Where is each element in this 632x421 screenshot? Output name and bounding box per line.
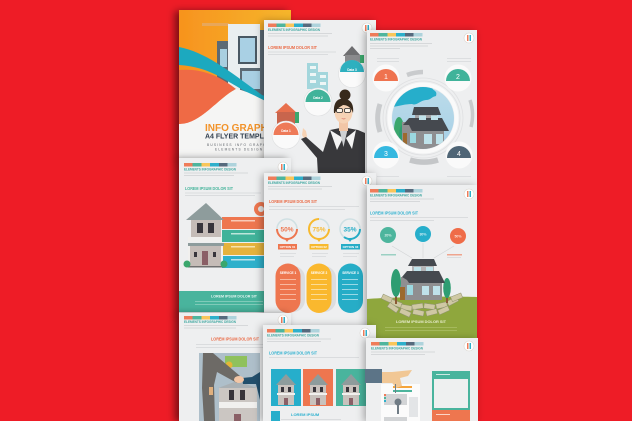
- logo: [362, 176, 372, 186]
- capsule service 3: [338, 264, 363, 313]
- gauge 50%: [277, 219, 297, 242]
- logo: [278, 315, 288, 325]
- cover subtitle: A4 FLYER TEMPLATE: [205, 134, 278, 140]
- capsule long shadows: [280, 266, 336, 312]
- gauge 75%: 75%: [312, 226, 326, 234]
- step 2 bubble: 2: [456, 74, 460, 81]
- page: three house tiles: [263, 325, 376, 421]
- logo: [278, 162, 288, 172]
- heading: LOREM IPSUM DOLOR SIT: [269, 350, 317, 356]
- corner text: [377, 58, 471, 177]
- house: [184, 203, 228, 268]
- page: handshake: [179, 313, 291, 421]
- page: percent gauges: [264, 173, 376, 325]
- cover building: [202, 23, 280, 96]
- teal footer band: LOREM IPSUM DOLOR SIT: [211, 294, 257, 298]
- coral house: [275, 103, 299, 124]
- option bubble 3: Data 3: [347, 68, 357, 72]
- step 2 bubble: [444, 64, 472, 92]
- capsule service 2: SERVICE 2: [311, 271, 328, 275]
- capsule service 2: [306, 264, 332, 313]
- document with key: [381, 384, 420, 421]
- central house illustration: [392, 87, 454, 149]
- handshake illustration: [199, 353, 260, 421]
- ribbon blue: [222, 256, 267, 268]
- flyer collage scene: [169, 6, 480, 421]
- step 1 bubble: [372, 64, 400, 92]
- circle 50% coral: 50%: [454, 234, 462, 238]
- header bar: [371, 342, 424, 346]
- header label: ELEMENTS INFOGRAPHIC DESIGN: [268, 181, 320, 185]
- option labels: OPTION 01: [280, 245, 296, 249]
- hand holding key: [382, 370, 412, 393]
- header label: ELEMENTS INFOGRAPHIC DESIGN: [184, 168, 236, 172]
- step 1 bubble: 1: [384, 74, 388, 81]
- tile coral: [303, 369, 333, 406]
- header label: ELEMENTS INFOGRAPHIC DESIGN: [371, 346, 423, 350]
- logo: [362, 23, 372, 33]
- logo: [464, 341, 474, 351]
- page: circular diagram: [367, 30, 477, 185]
- circle 30% blue: 30%: [419, 232, 427, 236]
- tile teal: [336, 369, 366, 406]
- heading: LOREM IPSUM DOLOR SIT: [268, 45, 317, 50]
- step 3 bubble: [372, 142, 400, 168]
- connector lines: [392, 243, 454, 258]
- heading: LOREM IPSUM DOLOR SIT: [370, 210, 418, 216]
- teal footer band: [179, 291, 291, 312]
- header bar: [370, 189, 422, 192]
- header label: ELEMENTS INFOGRAPHIC DESIGN: [267, 334, 319, 338]
- footer caption: LOREM IPSUM DOLOR SIT: [396, 320, 447, 324]
- blue towers: [307, 63, 328, 92]
- page: house on money: [367, 185, 477, 338]
- header bar: [267, 329, 320, 332]
- heading: LOREM IPSUM DOLOR SIT: [185, 186, 233, 191]
- header label: ELEMENTS INFOGRAPHIC DESIGN: [370, 38, 422, 42]
- cover title: INFO GRAPHIC: [205, 123, 278, 134]
- page: woman presenter: [264, 20, 376, 175]
- page: cover: [179, 10, 291, 160]
- header bar: [184, 163, 236, 166]
- green hill: [367, 297, 477, 338]
- header label: ELEMENTS INFOGRAPHIC DESIGN: [268, 28, 320, 32]
- logo: [360, 328, 370, 338]
- option bubble 1: Data 1: [281, 129, 291, 133]
- sleeve over pages: [365, 369, 382, 383]
- header label: ELEMENTS INFOGRAPHIC DESIGN: [184, 320, 236, 324]
- outer ring segments: [378, 72, 473, 162]
- trees: [391, 269, 451, 304]
- capsule service 1: SERVICE 1: [280, 271, 297, 275]
- capsule service 1: [276, 264, 300, 313]
- header label: ELEMENTS INFOGRAPHIC DESIGN: [370, 194, 422, 198]
- page: key handover: [366, 338, 478, 421]
- banknotes: [381, 293, 463, 317]
- heading: LOREM IPSUM DOLOR SIT: [211, 336, 259, 342]
- gauge 35%: [340, 219, 360, 242]
- logo: [464, 189, 474, 199]
- option labels: OPTION 03: [343, 245, 359, 249]
- page: cover: ELEMENTS DESIGN: [215, 148, 263, 152]
- header bar: [268, 24, 320, 27]
- cover caption: BUSINESS INFO GRAPHIC: [207, 143, 272, 147]
- header bar: [184, 316, 236, 320]
- header bar: [370, 33, 422, 36]
- gauge 35%: 35%: [343, 226, 357, 234]
- capsule service 3: SERVICE 3: [342, 271, 359, 275]
- tile blue: [271, 369, 301, 406]
- circle 30% blue: [415, 226, 431, 242]
- step 4 bubble: 4: [457, 151, 461, 158]
- circle 50% coral: [450, 228, 466, 244]
- ribbon teal: [222, 230, 267, 242]
- logo: [464, 33, 474, 43]
- header bar: [268, 176, 320, 180]
- sub item: LOREM IPSUM: [291, 412, 320, 417]
- coral wave: [179, 70, 236, 124]
- option bubble 1: [272, 121, 300, 149]
- ribbon orange: [222, 202, 268, 229]
- option labels: OPTION 02: [311, 245, 327, 249]
- option bubble 2: [304, 88, 332, 116]
- option labels: [278, 244, 360, 250]
- step 4 bubble: [446, 142, 472, 168]
- ribbon yellow: [222, 243, 267, 255]
- step 3 bubble: 3: [384, 151, 388, 158]
- info panel: [432, 371, 470, 421]
- house: [400, 259, 445, 300]
- woman presenter: [301, 90, 365, 175]
- heading: LOREM IPSUM DOLOR SIT: [269, 199, 317, 204]
- gauge 75%: [309, 219, 329, 242]
- gauge 50%: 50%: [280, 226, 294, 234]
- white wave: [179, 89, 291, 160]
- circle 20% teal: 20%: [384, 234, 392, 238]
- page: house ribbons: [179, 158, 291, 315]
- teal wave: [179, 47, 291, 113]
- grey building: [343, 46, 364, 65]
- circle 20% teal: [380, 227, 396, 243]
- option bubble 3: [338, 60, 366, 88]
- orange header area: [179, 10, 291, 105]
- option bubble 2: Data 2: [313, 96, 323, 100]
